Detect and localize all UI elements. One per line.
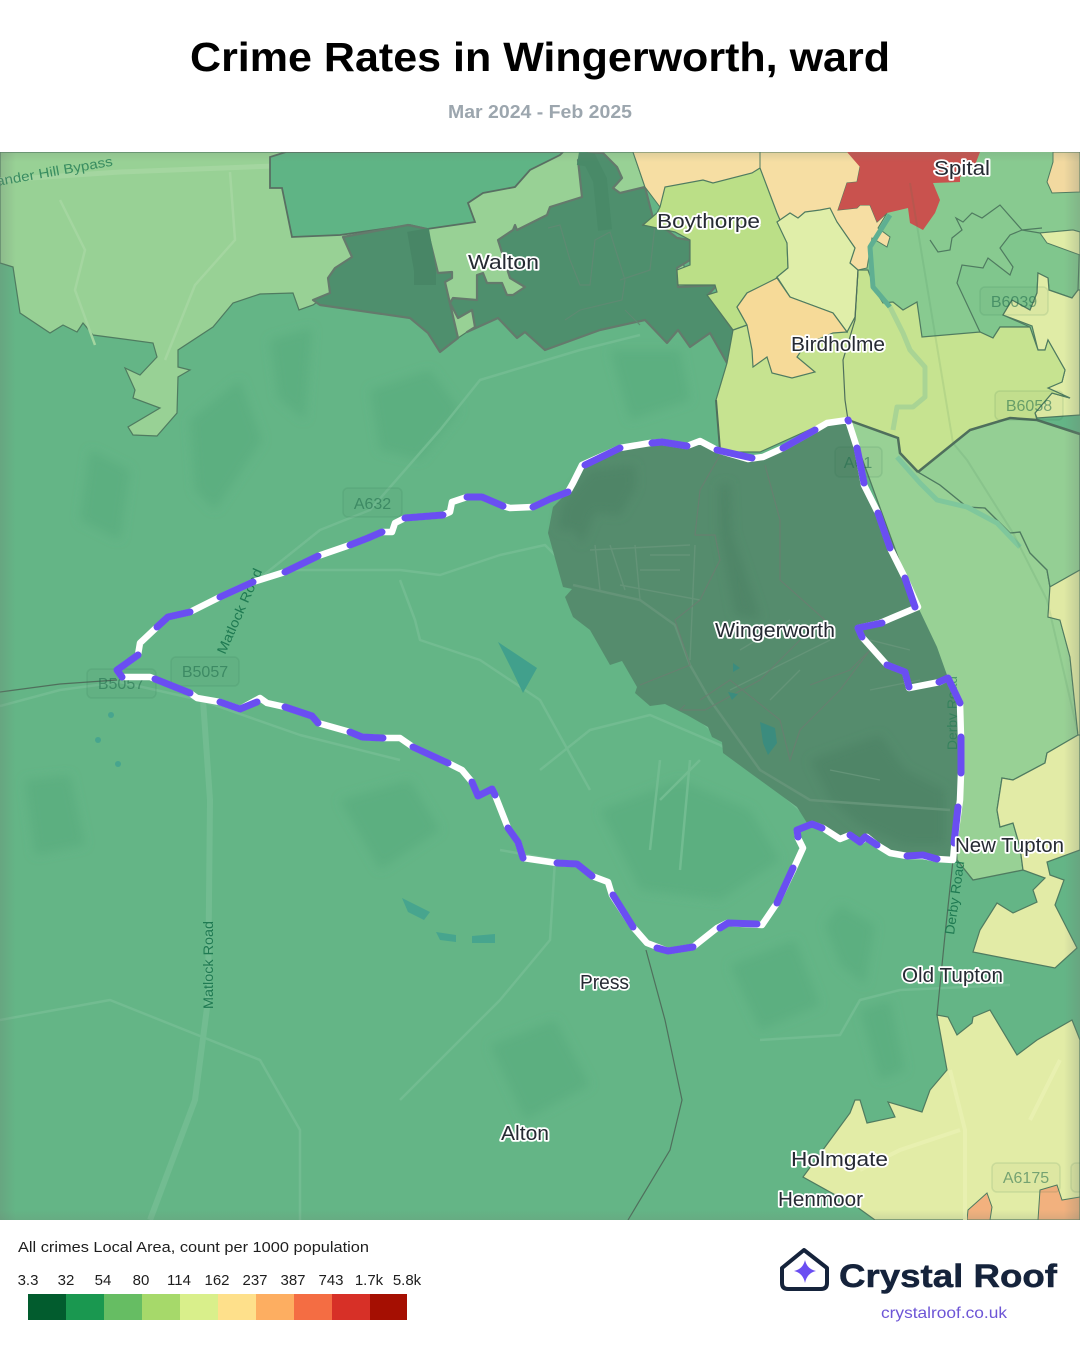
legend title: All crimes Local Area, count per 1000 population	[18, 1239, 369, 1256]
logo website: crystalroof.co.uk	[881, 1305, 1008, 1322]
base woodland and field shading	[25, 328, 905, 1120]
road shield: A61: A61	[844, 455, 872, 472]
area: red Spital	[838, 152, 980, 230]
area: Walton west cluster	[313, 225, 458, 352]
area: pale yellow north of Birdholme	[777, 208, 858, 332]
road shield: B6058: B6058	[1006, 398, 1052, 415]
area: Wingerworth ward highlight	[548, 420, 961, 860]
legend scale values	[18, 1272, 422, 1289]
date range subtitle: Mar 2024 - Feb 2025	[448, 102, 632, 122]
legend scale values: 1.7k	[355, 1272, 384, 1289]
area: pale yellow New Tupton	[973, 735, 1080, 968]
base faint roads	[0, 335, 1010, 1220]
road shield: B5057 east	[171, 657, 239, 686]
road shield: cropped east	[1071, 1163, 1080, 1192]
area: light green east of Wingerworth	[848, 420, 1078, 880]
area: pale yellow east sliver	[1048, 570, 1080, 735]
road shield: B5057 west: B5057	[98, 676, 144, 693]
legend scale values: 32	[58, 1272, 74, 1289]
river through Birdholme	[870, 215, 925, 430]
peach block divider	[760, 152, 761, 168]
map edge fade	[0, 152, 1080, 1220]
area: pale yellow south east	[803, 1010, 1080, 1220]
base area: mid green	[0, 152, 1080, 1220]
area: peach Birdholme	[737, 278, 847, 378]
area: lime green Boythorpe	[643, 168, 788, 330]
Wingerworth ward outline: purple dashes	[117, 420, 961, 951]
icon: house outline	[782, 1250, 827, 1289]
road shield: B5057 west	[87, 669, 156, 698]
area: lighter green north west	[0, 152, 690, 436]
place label: Press: Press	[580, 972, 629, 994]
legend scale values: 5.8k	[393, 1272, 422, 1289]
place label: Old Tupton: Old Tupton	[902, 965, 1003, 987]
Wingerworth ward outline: white line	[117, 420, 961, 951]
legend scale values: 743	[318, 1272, 344, 1289]
road shield: B6058	[995, 391, 1063, 420]
Wingerworth woodland shading	[558, 465, 945, 845]
area: mid green north east	[860, 152, 1080, 340]
place label: Holmgate: Holmgate	[791, 1149, 888, 1171]
area: light green north east of Wingerworth	[918, 418, 1080, 587]
area: orange patch south east	[1038, 1185, 1080, 1220]
place label: Birdholme: Birdholme	[791, 334, 885, 356]
north west faint roads	[0, 164, 269, 360]
road shield: A6175	[992, 1163, 1060, 1192]
panel: choropleth map	[0, 152, 1080, 1220]
legend scale values: 162	[204, 1272, 230, 1289]
Wingerworth footpaths	[640, 455, 870, 760]
legend	[18, 1239, 422, 1320]
place label: Spital: Spital	[934, 158, 990, 180]
area: peach north east corner	[1047, 152, 1080, 193]
Walton internal shading	[418, 158, 655, 325]
area: pale yellow north east patch	[1040, 230, 1080, 255]
road name: Matlock Road diagonal: Matlock Road	[214, 566, 265, 656]
road shield: A632: A632	[354, 496, 391, 513]
legend scale values: 80	[133, 1272, 149, 1289]
place label: Wingerworth: Wingerworth	[715, 620, 835, 642]
Wingerworth residential roads	[573, 545, 950, 810]
title: Crime Rates in Wingerworth, ward	[190, 34, 890, 80]
road shield: A6175: A6175	[1003, 1170, 1049, 1187]
place label: Alton: Alton	[501, 1123, 549, 1145]
road shield: B6039	[980, 287, 1048, 315]
legend scale values: 114	[167, 1272, 191, 1289]
place label: Henmoor: Henmoor	[778, 1189, 863, 1211]
area: teal green north	[270, 152, 563, 237]
place label: Walton: Walton	[468, 252, 539, 274]
north east ward boundary lines	[930, 205, 1042, 252]
road shield: A632	[343, 488, 402, 517]
area: peach north centre	[633, 152, 890, 270]
road name: Matlock Road vertical: Matlock Road	[201, 921, 216, 1009]
road shield: A61	[835, 447, 882, 477]
water: lake west	[498, 642, 537, 693]
area: Walton main cluster	[450, 152, 740, 363]
area: orange patch south	[967, 1193, 992, 1220]
legend scale values: 387	[280, 1272, 306, 1289]
east railway line	[910, 183, 1078, 733]
road shield: B5057 east: B5057	[182, 664, 228, 681]
place label: Boythorpe: Boythorpe	[657, 211, 760, 233]
area: lime green Birdholme surrounds	[716, 270, 1070, 472]
area: darker green north east	[957, 230, 1080, 338]
place label: New Tupton: New Tupton	[955, 835, 1064, 857]
road name: Derby Road north: Derby Road	[945, 676, 960, 750]
legend scale values: 3.3	[18, 1272, 38, 1289]
thin district boundaries	[0, 270, 1080, 1220]
legend scale values: 54	[95, 1272, 111, 1289]
water: small ponds	[95, 712, 495, 943]
water: Wingerworth ponds	[728, 663, 777, 755]
logo wordmark: Crystal Roof	[839, 1258, 1057, 1294]
area: pale yellow east strip	[1003, 273, 1080, 418]
south east faint roads	[860, 1060, 1060, 1220]
icon: purple sparkle	[794, 1260, 816, 1283]
legend colour bar	[28, 1294, 407, 1320]
road name: Derby Road south: Derby Road	[942, 860, 967, 935]
road shield: B6039: B6039	[991, 294, 1037, 311]
logo: Crystal Roof	[782, 1250, 1057, 1322]
river east	[897, 457, 1020, 547]
legend scale values: 237	[242, 1272, 268, 1289]
